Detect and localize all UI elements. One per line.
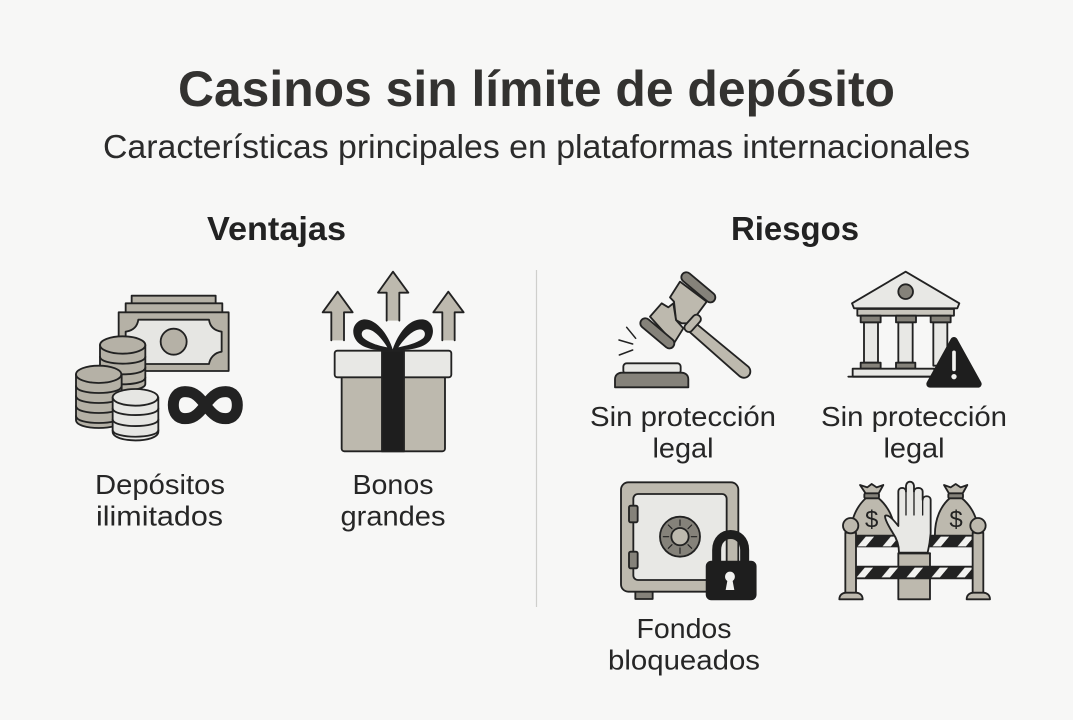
heading: Ventajas: Ventajas [207,210,346,247]
label: Sin protección legal (right) [821,401,1007,464]
label: Bonos grandes [340,469,446,532]
label: Fondos bloqueados [608,613,760,676]
label: Sin protección legal (left) [590,401,776,464]
title: Casinos sin límite de depósito [178,61,895,117]
label: Depósitos ilimitados: ilimitados [96,500,223,532]
label: Depósitos ilimitados: Depósitos [95,469,225,500]
icon: gift with arrows [323,272,464,451]
icon: money stack, coins and infinity [76,296,237,440]
icon: safe with padlock [621,482,756,599]
icon: blocked money bags with raised hand [839,482,990,599]
icon: bank with warning triangle [848,272,978,384]
icon: blocked money bags with raised hand: $ [865,506,878,533]
icon: blocked money bags with raised hand: $ [949,506,963,533]
label: Fondos bloqueados: bloqueados [608,644,760,676]
label: Bonos grandes: Bonos [352,469,434,500]
label: Sin protección legal (left): Sin protección [590,401,776,432]
icon: broken gavel [615,270,750,387]
subtitle: Características principales en plataformas internacionales [103,128,970,165]
label: Sin protección legal (left): legal [652,432,714,464]
label: Sin protección legal (right): Sin protección [821,401,1007,432]
label: Bonos grandes: grandes [340,500,446,532]
label: Sin protección legal (right): legal [884,432,944,464]
label: Fondos bloqueados: Fondos [636,613,732,644]
heading: Riesgos: Riesgos [731,210,859,247]
label: Depósitos ilimitados [95,469,225,532]
